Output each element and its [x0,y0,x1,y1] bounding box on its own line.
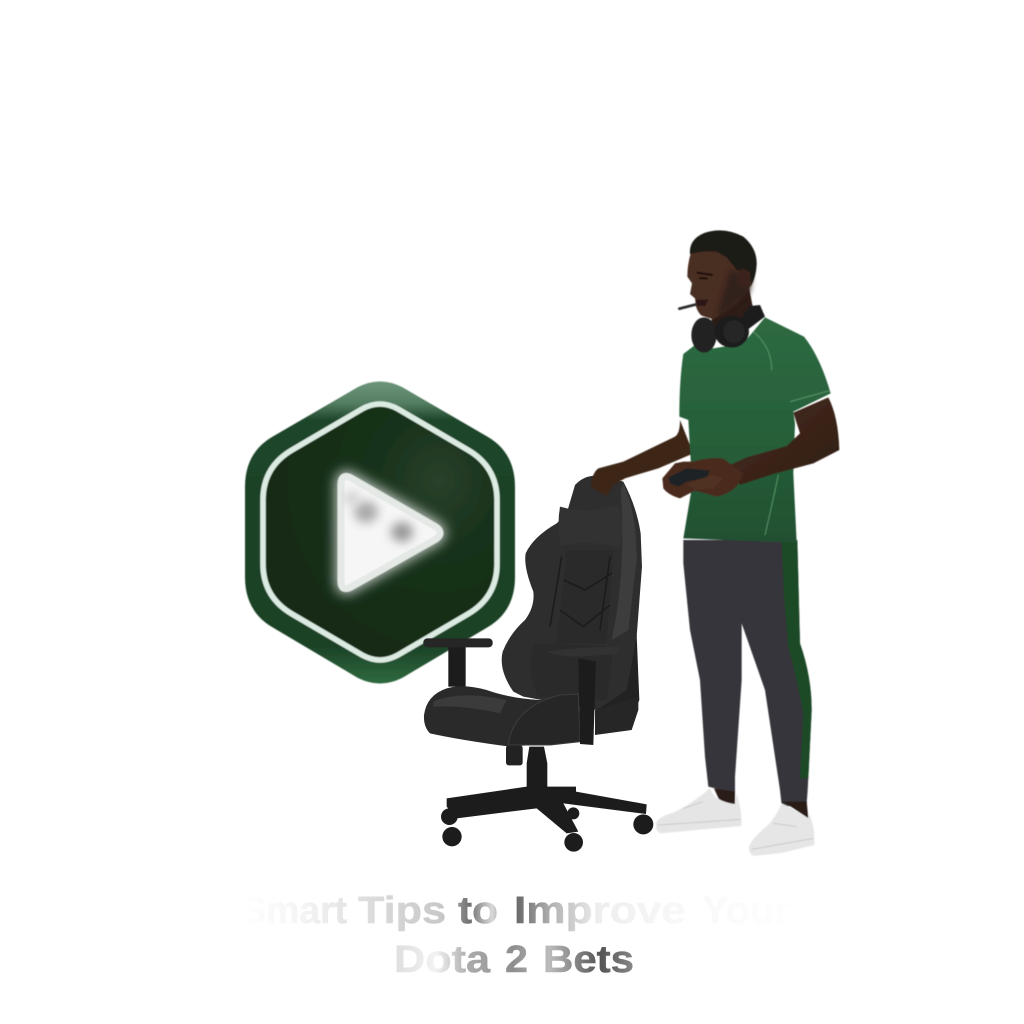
chair center panel [557,550,613,643]
head [687,247,753,319]
chair right armrest [547,647,620,745]
icon: hexagon play badge [245,382,515,684]
person [591,230,839,856]
title line 2: 2 [505,939,528,981]
chair seat [424,686,580,747]
title line 2 [394,939,634,981]
hexagon neon ring [263,404,497,660]
title line 1: Your [702,890,790,932]
shirt raglan seam and sleeve trim [753,332,829,535]
hexagon outer bezel [245,382,515,684]
near arm [727,397,839,485]
ankle left [714,788,735,805]
chair backrest [502,476,642,710]
ankle right [782,802,808,818]
chair neck pillow [558,505,622,548]
chair seams [550,557,612,630]
play triangle [341,477,440,589]
chair gas lift [527,747,547,790]
play icon glow [341,477,440,589]
title line 1: Tips [358,890,446,932]
chair star base [447,787,647,833]
title line 2: Bets [543,939,634,981]
title line 1: Smart [241,890,347,932]
hands [662,458,743,498]
trouser green stripe [782,540,812,778]
title line 2: Dota [394,939,491,981]
right shoe [749,803,814,856]
ear [737,269,749,288]
face shadow [716,270,752,319]
hair [690,230,757,285]
chair height knob [506,745,523,765]
title [241,890,790,981]
title line 1: to [458,890,498,932]
headset mic [679,305,695,309]
lips [696,299,708,306]
chair left armrest [423,638,493,687]
left shoe [656,788,741,833]
chair lumbar pillow [530,643,613,700]
chair side bolster panel [595,635,639,733]
neck [712,283,753,337]
seat highlight [433,695,507,713]
game controller [669,468,710,487]
headphones [691,305,765,353]
title line 1: Improve [514,890,686,932]
title line 1 [241,890,790,932]
far arm and hand on chair [591,420,693,496]
chair casters [441,808,653,852]
hexagon inner face [263,404,497,660]
chair back side highlight [612,483,637,640]
eye and brow [697,273,713,279]
chair rear caster [567,807,579,819]
finger over controller [687,475,723,490]
gaming chair [423,476,653,852]
chair seat side guard [508,694,580,745]
shirt body [679,317,831,543]
upper body [591,230,839,543]
trousers [656,540,814,856]
chair recline mechanism [595,697,638,735]
